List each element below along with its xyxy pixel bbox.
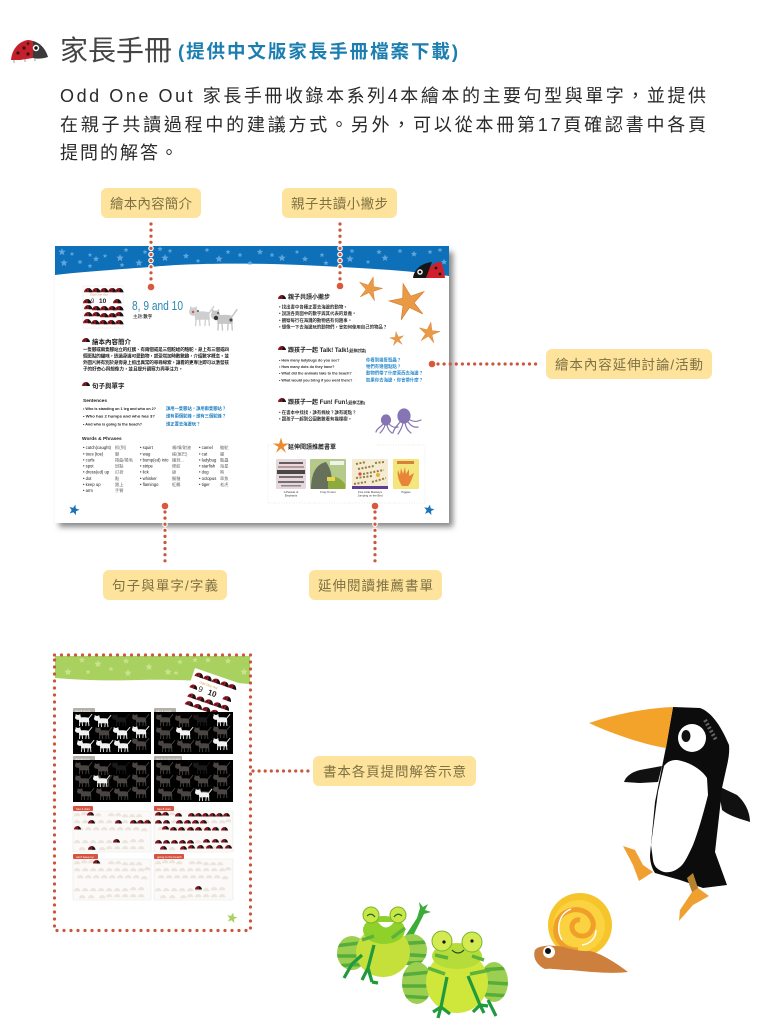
- heading: talk talk: 跟孩子一起 Talk! Talk!(延伸討論): [288, 346, 367, 354]
- heading: sentences and words: 句子與單字: [92, 381, 125, 390]
- book captions: [284, 490, 411, 498]
- heading: fun fun: [278, 398, 366, 406]
- sentences list: • Who is standing on 1 leg and who on 2?: [83, 406, 157, 411]
- summary paragraph: 個斑點的貓咪，透過身邊可愛動物，感受增加時數數趣，介紹數字概念。並: [83, 352, 229, 360]
- illustration: frog waving: [335, 902, 431, 983]
- icon: green star: [226, 912, 238, 923]
- column 3: 貓: [220, 450, 225, 458]
- book captions: A Parade of: [284, 490, 299, 494]
- cat answer: has 4 spots: has 4 spots: [156, 709, 172, 713]
- ladybug answer: going to the beach: [154, 854, 233, 900]
- book cover thumbnail: 10: [99, 298, 107, 305]
- summary paragraph: 一隻腳或兩隻腳站立的紅鶴、有兩個或是三個駝峰的駱駝、身上有三個或四: [83, 346, 229, 353]
- column 2: • bump(ed) into: [140, 458, 169, 462]
- sentences list: 誰用一隻腳站，誰用兩隻腳站？: [166, 405, 226, 412]
- tilted book cover: [180, 668, 238, 726]
- label: reading tips: [282, 188, 397, 218]
- book cover thumbnail: Odd One Out: [90, 292, 108, 296]
- blue star band: [55, 246, 449, 276]
- column 3: • cat: [199, 452, 208, 456]
- column 1: 手臂: [115, 487, 123, 494]
- sentences list: • Who has 2 humps and who has 3?: [83, 414, 156, 418]
- label: sentences and words: 句子與單字/字義: [112, 578, 218, 594]
- talk questions: [279, 356, 423, 384]
- heading: reading tips: 親子共讀小撇步: [288, 293, 330, 301]
- book captions: Elephants: [285, 494, 298, 498]
- column 2: • wag: [140, 452, 151, 456]
- column 3: • dog: [199, 470, 209, 474]
- column 3: 章魚: [220, 475, 229, 482]
- title: 家長手冊: [60, 35, 172, 66]
- left foot: [623, 846, 653, 881]
- activity list: • 在書本中找找，誰有條紋？誰有斑點？: [279, 409, 356, 416]
- label: answers: 書本各頁提問解答示意: [323, 764, 466, 780]
- column 3: 瓢蟲: [220, 456, 229, 464]
- heading: reading tips: [278, 293, 330, 301]
- column 3: [199, 444, 229, 488]
- book 1: [276, 459, 306, 489]
- column 2: • squirt: [140, 445, 154, 450]
- book 3: [352, 459, 388, 489]
- illustration: starfish: [356, 274, 441, 346]
- summary paragraph: 子的好奇心與想像力，並且提升觀察力與專注力。: [83, 366, 183, 372]
- intro text block: Odd One Out 家長手冊收錄本系列4本繪本的主要句型與單字，並提供: [60, 86, 706, 106]
- label: book summary: [101, 188, 201, 218]
- connector: reading tips: [337, 224, 343, 289]
- heading: 延伸閱讀推薦書單: [288, 443, 336, 451]
- column 1: [83, 444, 134, 494]
- column 2: • flamingo: [140, 482, 159, 487]
- column 1: 腳: [115, 450, 119, 458]
- tilted book cover: 10: [206, 688, 218, 699]
- intro text block: 提問的解答。: [60, 143, 178, 163]
- ladybug answer: can't keep up: [73, 854, 151, 900]
- column 3: 駱駝: [220, 444, 228, 451]
- book cover thumbnail: [83, 286, 124, 328]
- column 1: • keep up: [83, 482, 101, 487]
- book 2: [310, 459, 346, 489]
- reading tips list: • 想像一下去海邊玩的動物們，會如何使用自己的物品？: [279, 324, 387, 330]
- cat answer: has 8 spots: [73, 708, 151, 754]
- icon: blue star right: [423, 504, 435, 515]
- column 3: 老虎: [220, 481, 229, 488]
- theme line: 主題:數字: [133, 313, 153, 320]
- activity list: • 跟孩子一起到公園數數看有幾棵樹。: [279, 416, 352, 422]
- connector: book list: [372, 503, 378, 563]
- label: reading tips: 親子共讀小撇步: [291, 196, 388, 212]
- label: recommended list: 延伸閱讀推薦書單: [318, 578, 433, 594]
- cat answer: dressed up: [73, 756, 151, 802]
- words and phrases table: Words & Phrases: [82, 436, 122, 442]
- beak: [589, 707, 673, 748]
- right wing: [718, 786, 750, 822]
- heading: fun fun: 跟孩子一起 Fun! Fun!(延伸活動): [288, 398, 366, 406]
- column 3: 狗: [220, 468, 224, 476]
- talk questions: 動物們帶了什麼東西去海邊？: [366, 370, 423, 376]
- book captions: Five Little Monkeys: [358, 490, 383, 494]
- sentences list: 誰有兩個駝峰，誰有三個駝峰？: [166, 412, 226, 420]
- column 2: • lick: [140, 470, 150, 474]
- column 2: [140, 444, 192, 488]
- column 2: 搖(尾巴): [172, 450, 188, 458]
- connector: sentences: [162, 503, 168, 563]
- connector: answers: [253, 769, 309, 773]
- column 3: 海星: [220, 462, 228, 470]
- frame: [54, 655, 250, 930]
- illustration: cats: [189, 306, 237, 330]
- label: answers: [313, 756, 476, 786]
- cat answer: dressed up: dressed up: [75, 757, 90, 761]
- cat answer: has 8 spots: has 8 spots: [75, 709, 91, 713]
- column 2: 紅鶴: [172, 481, 180, 488]
- panel: handbook spread: [55, 246, 453, 527]
- book captions: Piggies: [401, 490, 411, 494]
- right foot: [679, 873, 709, 921]
- icon: page ladybug: [413, 262, 445, 278]
- summary paragraph: 外圖片將有別於身旁身上抓出異常的尋尋線索，讓看的更專注即可以激發孩: [83, 359, 229, 366]
- sentences list: [83, 398, 226, 428]
- book captions: Frog On Her: [320, 490, 336, 494]
- column 2: • whisker: [140, 476, 157, 481]
- ladybug answer: has 8 dots: [154, 806, 233, 852]
- ladybug answer: has 8 dots: has 8 dots: [157, 807, 171, 811]
- column 1: • arm: [83, 488, 93, 493]
- activity list: [279, 409, 356, 422]
- heading: book summary: [82, 337, 132, 346]
- label: recommended list: [309, 570, 442, 600]
- column 3: • starfish: [199, 464, 216, 468]
- column 3: • ladybug: [199, 458, 217, 462]
- green star band: [55, 656, 250, 684]
- column 1: 斑點: [115, 462, 124, 470]
- column 1: • toes (toe): [83, 452, 104, 456]
- tilted book cover: 9: [197, 684, 205, 695]
- reading tips list: • 觀察每行在海灘的動物遇有何趣事。: [279, 317, 352, 324]
- illustration: penguin: [589, 707, 750, 921]
- column 1: 抓(到): [115, 444, 127, 451]
- book captions: Jumping on the Bed: [358, 494, 383, 498]
- icon: orange star: [273, 438, 289, 453]
- intro text block: 在親子共讀過程中的建議方式。另外，可以從本冊第17頁確認書中各頁: [60, 115, 706, 135]
- intro text block: [60, 86, 706, 163]
- column 3: • tiger: [199, 482, 210, 487]
- body: [650, 707, 729, 888]
- column 3: • octopus: [199, 476, 216, 481]
- cat answer: going to the beach: [154, 756, 233, 802]
- talk questions: 如果你去海邊，你會帶什麼？: [366, 376, 423, 384]
- cat answer: going to the beach: going to the beach: [156, 757, 181, 761]
- column 1: • dot: [83, 476, 92, 481]
- column 1: • catch(caught): [83, 445, 112, 450]
- column 2: 撞到...: [172, 456, 184, 462]
- reading tips list: [279, 304, 387, 330]
- heading: book summary: 繪本內容簡介: [92, 337, 132, 346]
- panel: answers page: [54, 655, 250, 930]
- column 3: • camel: [199, 445, 213, 450]
- ladybug answer: going to the beach: going to the beach: [157, 855, 182, 859]
- column 2: • stripe: [140, 464, 154, 468]
- column 2: 噴/噴/射液: [172, 444, 192, 451]
- talk questions: • How many ladybugs do you see?: [279, 358, 340, 362]
- talk questions: • What did the animals take to the beach?: [279, 372, 352, 376]
- label: book summary: 繪本內容簡介: [110, 196, 192, 212]
- column 1: 打扮: [115, 468, 124, 476]
- label: extended discussion: 繪本內容延伸討論/活動: [555, 356, 703, 372]
- sentences list: • And who is going to the beach?: [83, 422, 143, 426]
- book title: 8, 9 and 10: [132, 298, 183, 313]
- sentences list: 誰正要去海邊玩？: [166, 420, 200, 428]
- book 4: [393, 459, 419, 489]
- column 2: 舔: [172, 470, 177, 476]
- talk questions: • How many dots do they have?: [279, 365, 335, 369]
- column 1: 捲曲/捲毛: [115, 456, 134, 464]
- label: sentences and words: [103, 570, 227, 600]
- talk questions: • What would you bring if you went there?: [279, 378, 353, 382]
- column 2: 條紋: [172, 462, 181, 470]
- illustration: snail: [534, 893, 628, 973]
- column 2: 鬍鬚: [172, 475, 181, 482]
- foot top: [687, 873, 698, 892]
- heading: sentences and words: [82, 381, 125, 390]
- illustration: frog smiling: [400, 931, 510, 1018]
- column 1: • dress(ed) up: [83, 470, 110, 474]
- column 1: • curls: [83, 458, 94, 462]
- left wing: [624, 766, 662, 783]
- subtitle download link: (提供中文版家長手冊檔案下載): [178, 41, 458, 62]
- belly: [651, 760, 708, 872]
- reading tips list: • 找出書中各種正要去海邊的動物。: [279, 304, 348, 310]
- ladybug answer: has 4 dots: has 4 dots: [76, 807, 90, 811]
- talk questions: 牠們有幾個點點？: [366, 363, 401, 370]
- heading: talk talk: [278, 346, 367, 354]
- illustration: octopuses: [376, 409, 421, 434]
- icon: title ladybug: [11, 40, 48, 63]
- panel: recommended reading: [268, 438, 425, 503]
- book cover thumbnail: 9: [91, 299, 95, 305]
- ladybug answer: has 4 dots: [73, 806, 151, 852]
- column 1: 點: [115, 475, 120, 482]
- words and phrases table: [82, 436, 229, 494]
- column 1: 跟上: [115, 481, 123, 488]
- column 1: • spot: [83, 464, 94, 468]
- icon: blue star left: [68, 503, 80, 516]
- sentences list: Sentences: [83, 398, 107, 404]
- talk questions: 你看到幾隻瓢蟲？: [366, 356, 401, 364]
- cat answer: has 4 spots: [154, 708, 233, 754]
- reading tips list: • 說說各頁圖中的數字與其代表的意義。: [279, 310, 356, 317]
- eye: [678, 724, 706, 752]
- summary paragraph: [83, 346, 229, 372]
- ladybug answer: can't keep up: can't keep up: [76, 855, 94, 859]
- connector: extended discussion: [429, 361, 541, 367]
- connector: summary: [148, 224, 154, 290]
- tilted book cover: Odd One Out: [199, 680, 218, 690]
- label: extended discussion: [546, 349, 712, 379]
